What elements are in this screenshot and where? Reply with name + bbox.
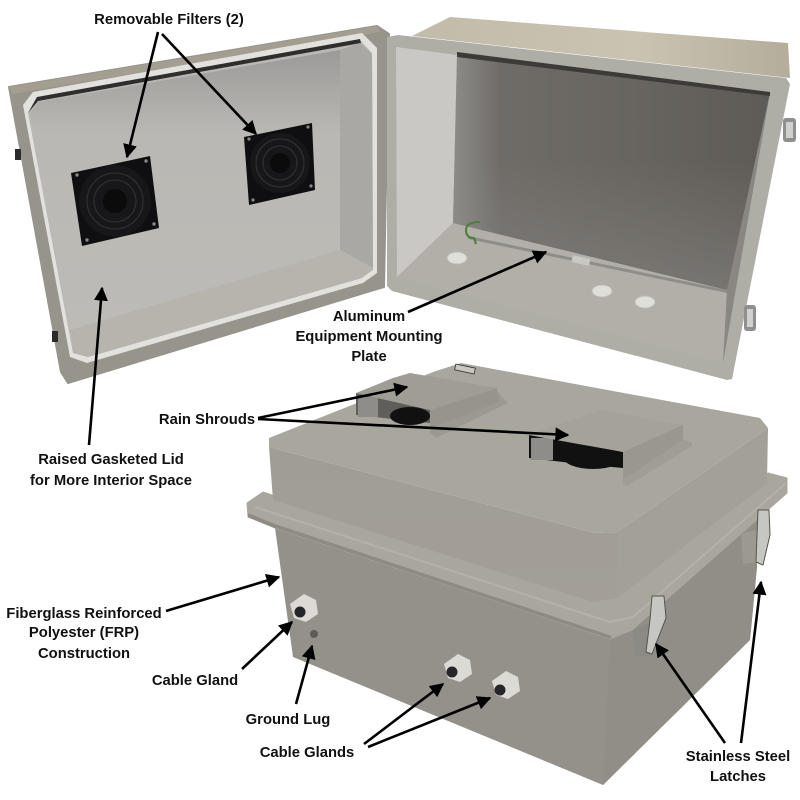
rain shroud, left bbox=[356, 373, 508, 438]
cable gland, side left bbox=[290, 594, 318, 622]
flange bbox=[247, 473, 787, 639]
lid outer rim bbox=[9, 26, 389, 383]
floor gland, middle bbox=[592, 285, 612, 297]
label: raised lid: Raised Gasketed Lid bbox=[38, 452, 184, 468]
arrow: gland middle bbox=[364, 684, 443, 744]
arrow: cable gland bbox=[242, 622, 292, 669]
label: aluminum equipment mounting plate: Aluminum bbox=[333, 309, 405, 325]
arrow: shroud right bbox=[258, 419, 568, 435]
floor gland, left bbox=[447, 252, 467, 264]
label: rain shrouds: Rain Shrouds bbox=[159, 412, 255, 428]
floor gland, right bbox=[635, 296, 655, 308]
open lid, interior view bbox=[9, 26, 389, 383]
label: cable gland: Cable Gland bbox=[152, 673, 238, 689]
closed enclosure bbox=[247, 363, 787, 785]
fan filter, right bbox=[244, 123, 315, 205]
latch, open enclosure top bbox=[783, 118, 796, 142]
label: FRP: Construction bbox=[38, 646, 130, 662]
ground lug bbox=[310, 630, 318, 638]
box rim bbox=[387, 35, 790, 380]
lid skirt right bbox=[617, 428, 768, 598]
open enclosure body, interior view bbox=[387, 17, 790, 380]
label: FRP: Fiberglass Reinforced bbox=[6, 606, 162, 622]
box left wall bbox=[396, 47, 457, 277]
fan filter, left bbox=[71, 156, 159, 246]
arrow: gland right bbox=[368, 698, 490, 747]
arrow: filter right bbox=[162, 34, 256, 134]
label plate bbox=[455, 364, 475, 374]
arrow: shroud left bbox=[258, 387, 407, 418]
latch, front bbox=[633, 596, 666, 657]
hinge side tabs bbox=[15, 149, 21, 160]
rain shroud, right bbox=[529, 410, 692, 486]
lid gasket bbox=[23, 33, 377, 363]
ground wire bbox=[466, 222, 480, 244]
cable gland, front middle bbox=[444, 654, 472, 682]
arrow: filter left bbox=[127, 32, 158, 157]
body bbox=[275, 528, 757, 785]
lid interior bbox=[28, 40, 373, 357]
latch, open enclosure bottom bbox=[744, 305, 756, 331]
label: cable glands: Cable Glands bbox=[260, 745, 354, 761]
label: removable filters: Removable Filters (2) bbox=[94, 12, 244, 28]
box floor bbox=[397, 223, 727, 363]
label: FRP: Polyester (FRP) bbox=[29, 625, 139, 641]
label: latches: Latches bbox=[710, 769, 766, 785]
arrow: mounting plate bbox=[408, 252, 546, 312]
latch, right bbox=[741, 510, 770, 565]
arrow: latch front bbox=[656, 644, 725, 743]
arrow: latch right bbox=[741, 582, 761, 743]
arrow: FRP bbox=[166, 577, 279, 611]
label: raised lid: for More Interior Space bbox=[30, 473, 192, 489]
label: ground lug: Ground Lug bbox=[246, 712, 330, 728]
arrow: raised lid bbox=[89, 288, 102, 445]
box top surface bbox=[412, 17, 790, 78]
cable gland, front right bbox=[492, 671, 520, 699]
label: aluminum equipment mounting plate: Plate bbox=[351, 349, 387, 365]
lid skirt front bbox=[269, 447, 617, 602]
mounting plate bbox=[453, 52, 770, 293]
body right side bbox=[603, 519, 757, 785]
lid top bbox=[269, 363, 768, 533]
arrow: ground lug bbox=[296, 646, 312, 704]
label: latches: Stainless Steel bbox=[686, 749, 790, 765]
label: aluminum equipment mounting plate: Equipment Mounting bbox=[295, 329, 443, 345]
box right wall bbox=[723, 93, 770, 363]
